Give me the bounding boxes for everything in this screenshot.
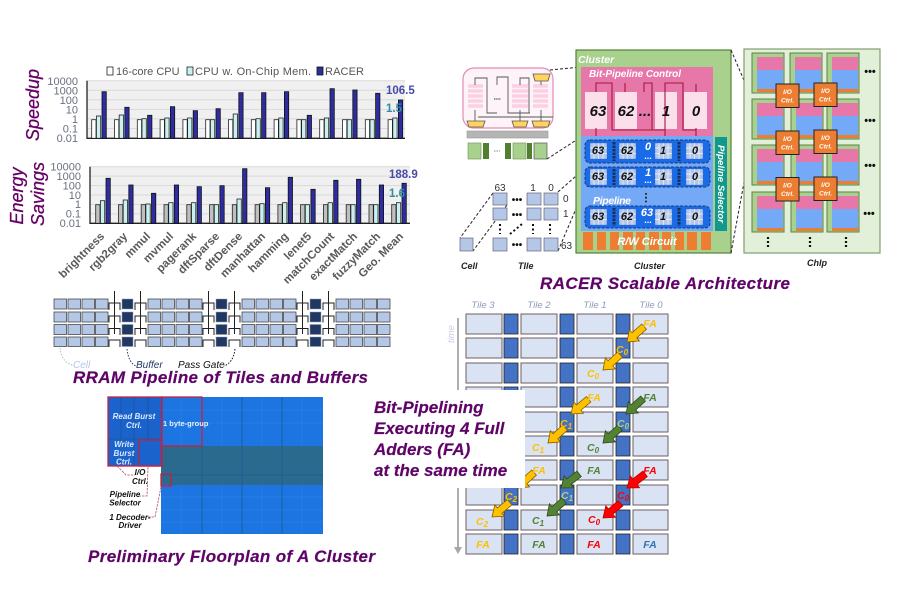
pipeline area: 1 (660, 145, 666, 157)
bar chart: speedup: 10000 (47, 76, 78, 88)
bar chart: energy savings: 1000 (57, 171, 81, 183)
caption: Cell: Cell (461, 261, 478, 271)
bit-pipeline control: 0 (692, 103, 701, 120)
yellow adder: FA (643, 318, 657, 330)
yellow adder: 1 (540, 446, 545, 455)
bar chart: speedup: 100 (60, 95, 78, 107)
green adder: FA (587, 465, 601, 477)
bar chart: energy savings: 0.01 (60, 218, 81, 230)
bit-pipeline control: 62 (618, 103, 635, 120)
diagram: bit-pipelining timing grid: Tile 0 (639, 300, 663, 311)
green adder: FA (532, 539, 546, 551)
legend: CPU w. On-Chip Mem. (195, 66, 311, 78)
panel: chip (744, 49, 880, 253)
category labels: exactMatch (307, 231, 360, 283)
bar chart: energy savings: 10000 (50, 162, 81, 174)
bar chart: speedup: 1000 (54, 86, 78, 98)
pipeline area: 62 (621, 145, 633, 157)
category labels: mmul (123, 231, 153, 261)
red adder: 0 (596, 518, 601, 527)
green adder: C (561, 490, 569, 502)
green adder: 0 (625, 422, 630, 431)
red adder: C (617, 490, 625, 502)
yellow adder: C (587, 368, 595, 380)
connector lines: tile to cluster (460, 67, 587, 251)
red adder: FA (643, 465, 657, 477)
diagram: tile cell grid: ••• (512, 195, 523, 206)
yellow adder: 2 (512, 495, 518, 504)
diagram: tile cell grid: 0 (563, 194, 569, 205)
pipeline area: 1 (645, 167, 651, 179)
diagram: preliminary floorplan: Write (114, 440, 134, 449)
pipeline area: 1 (660, 211, 666, 223)
pipeline area (581, 136, 713, 231)
bit-pipeline control (581, 67, 713, 137)
diagram: tile detail (463, 68, 553, 159)
bar chart: speedup: 0.1 (63, 124, 78, 136)
yellow adder: C (616, 344, 624, 356)
category labels: fuzzyMatch (331, 231, 383, 283)
pipeline area: 0 (645, 141, 652, 153)
bar chart: speedup: 10 (66, 104, 78, 116)
diagram: preliminary floorplan: Ctrl. (132, 477, 148, 486)
diagram: RRAM pipeline: Pass Gate (178, 360, 225, 371)
diagram: tile cell grid: ••• (512, 240, 523, 251)
pipeline area: 0 (692, 171, 699, 183)
diagram: preliminary floorplan: Pipeline (110, 490, 141, 499)
category labels: pagerank (154, 230, 200, 275)
legend: 16-core CPU (116, 66, 180, 78)
panel: chip: ••• (863, 208, 875, 220)
pipeline area: ... (644, 151, 652, 161)
legend (107, 66, 364, 78)
pipeline area: 1 (660, 171, 666, 183)
diagram: RRAM pipeline: Cell (73, 360, 91, 371)
category labels: lenet5 (282, 230, 315, 263)
green adder: C (587, 442, 595, 454)
R/W circuit: R/W Circuit (617, 236, 678, 248)
diagram: preliminary floorplan: Read Burst (113, 412, 156, 421)
yellow adder: FA (532, 465, 546, 477)
title: RACER Scalable Architecture: RACER Scalable Architecture (540, 274, 790, 293)
diagram: tile cell grid (460, 183, 573, 252)
diagram: bit-pipelining timing grid (446, 300, 668, 554)
pipeline area: ... (644, 175, 652, 185)
green adder: C (617, 418, 625, 430)
category labels: hamming (246, 231, 291, 275)
connector lines: cluster to chip (731, 50, 752, 253)
pipeline selector: Pipeline Selector (715, 145, 726, 224)
pipeline area: Pipeline (593, 195, 631, 207)
diagram: bit-pipelining timing grid: time (446, 325, 457, 343)
yellow adder: C (505, 491, 513, 503)
bar chart: energy savings: 188.9 (389, 169, 418, 181)
pipeline area: 0 (692, 145, 699, 157)
yellow adder: FA (587, 392, 601, 404)
category labels: Geo. Mean (357, 231, 406, 280)
bit-pipeline control: 63 (590, 103, 607, 120)
red adder (587, 465, 657, 551)
diagram: tile cell grid: 1 (563, 209, 569, 220)
diagram: preliminary floorplan: I/O (135, 468, 146, 477)
category labels: matchCount (281, 231, 337, 287)
caption: Chip: ChIp (807, 258, 827, 268)
pipeline area: 0 (692, 211, 699, 223)
panel: chip: ••• (864, 66, 876, 78)
bar chart: speedup: 106.5 (386, 85, 415, 97)
pipeline area: ... (644, 215, 652, 225)
callout: bit-pipelining: Executing 4 Full (374, 419, 506, 438)
red adder: C (588, 514, 596, 526)
bar chart: speedup: 1 (72, 114, 78, 126)
category labels (57, 230, 406, 287)
diagram: preliminary floorplan: Driver (118, 521, 142, 530)
panel: chip: ••• (864, 160, 876, 172)
diagram: bit-pipelining timing grid: Tile 2 (527, 300, 551, 311)
diagram: tile cell grid: 63 (494, 183, 506, 194)
diagram: RRAM pipeline (54, 291, 390, 371)
diagram: tile cell grid: ••• (512, 210, 523, 221)
panel: chip: ••• (864, 115, 876, 127)
yellow adder (476, 318, 657, 551)
yellow adder: 1 (568, 422, 573, 431)
green adder: C (532, 515, 540, 527)
green adder: 1 (569, 494, 574, 503)
diagram: RRAM pipeline: Buffer (136, 360, 163, 371)
caption: Tile: TIle (518, 261, 534, 271)
diagram: preliminary floorplan: Ctrl. (126, 421, 142, 430)
bar chart: speedup: 0.01 (57, 133, 78, 145)
bar chart: speedup (47, 76, 415, 145)
bar chart: energy savings: 10 (69, 190, 81, 202)
bit-pipeline control: Bit-Pipeline Control (589, 69, 681, 80)
category labels: manhattan (219, 231, 268, 280)
pipeline area: 63 (592, 145, 604, 157)
diagram: preliminary floorplan: Ctrl. (116, 458, 132, 466)
axis title: Speedup: Speedup (23, 69, 43, 141)
blue adder: FA (643, 539, 657, 551)
axis title: Energy Savings: Savings (28, 162, 48, 226)
diagram: preliminary floorplan: 1 Decoder- (109, 513, 151, 522)
category labels: dftSparse (176, 231, 222, 277)
diagram: preliminary floorplan: Burst (114, 449, 135, 458)
bit-pipeline control: ... (639, 103, 651, 120)
diagram: preliminary floorplan: Selector (109, 498, 142, 508)
yellow adder: C (532, 442, 540, 454)
callout: bit-pipelining: at the same time (374, 461, 507, 480)
green adder: FA (643, 392, 657, 404)
callout: bit-pipelining: Bit-Pipelining (374, 398, 484, 417)
bar chart: energy savings: 1 (75, 199, 81, 211)
diagram: bit-pipelining timing grid: Tile 3 (471, 300, 495, 311)
diagram: tile cell grid: 0 (548, 183, 554, 194)
yellow adder: FA (476, 539, 490, 551)
title: RRAM Pipeline of Tiles and Buffers: RRAM Pipeline of Tiles and Buffers (73, 368, 368, 387)
callout: bit-pipelining: Adders (FA) (373, 440, 471, 459)
diagram: preliminary floorplan: 1 byte-group (163, 419, 209, 428)
axis title: Energy Savings (7, 162, 48, 226)
panel: cluster (576, 50, 731, 253)
yellow adder: C (560, 418, 568, 430)
title: Preliminary Floorplan of A Cluster: Preliminary Floorplan of A Cluster (88, 547, 376, 566)
diagram: bit-pipelining timing grid: Tile 1 (583, 300, 607, 311)
category labels: dftDense (202, 231, 245, 274)
yellow adder: 0 (595, 372, 600, 381)
bit-pipeline control: 1 (662, 103, 670, 120)
caption: Cluster: Cluster (634, 261, 666, 271)
bar chart: energy savings: 100 (63, 180, 81, 192)
red adder: FA (587, 539, 601, 551)
pipeline area: 62 (621, 171, 633, 183)
diagram: preliminary floorplan (108, 397, 323, 534)
bar chart: energy savings (50, 162, 418, 230)
panel: cluster: Cluster (578, 54, 615, 66)
bar chart: speedup: 1.5 (386, 103, 403, 115)
green adder: 0 (595, 446, 600, 455)
R/W circuit (583, 232, 711, 250)
green adder (532, 392, 657, 551)
pipeline area: 63 (641, 207, 653, 219)
yellow adder: C (476, 516, 484, 528)
yellow adder: 0 (624, 348, 629, 357)
yellow adder: 2 (483, 520, 489, 529)
green adder: 1 (540, 519, 545, 528)
category labels: brightness (57, 231, 107, 281)
bar chart: energy savings: 0.1 (66, 208, 81, 220)
diagram: tile cell grid: 1 (530, 183, 536, 194)
pipeline area: 62 (621, 211, 633, 223)
pipeline area: 63 (592, 211, 604, 223)
category labels: rgb2gray (87, 230, 131, 274)
callout: bit-pipelining (370, 390, 525, 488)
axis title: Energy Savings: Energy (7, 166, 27, 225)
legend: RACER (325, 66, 364, 78)
bar chart: energy savings: 1.6 (389, 188, 405, 200)
red adder: 0 (625, 494, 630, 503)
diagram: tile cell grid: 63 (561, 241, 573, 252)
pipeline area: 63 (592, 171, 604, 183)
category labels: mvmul (141, 231, 176, 265)
